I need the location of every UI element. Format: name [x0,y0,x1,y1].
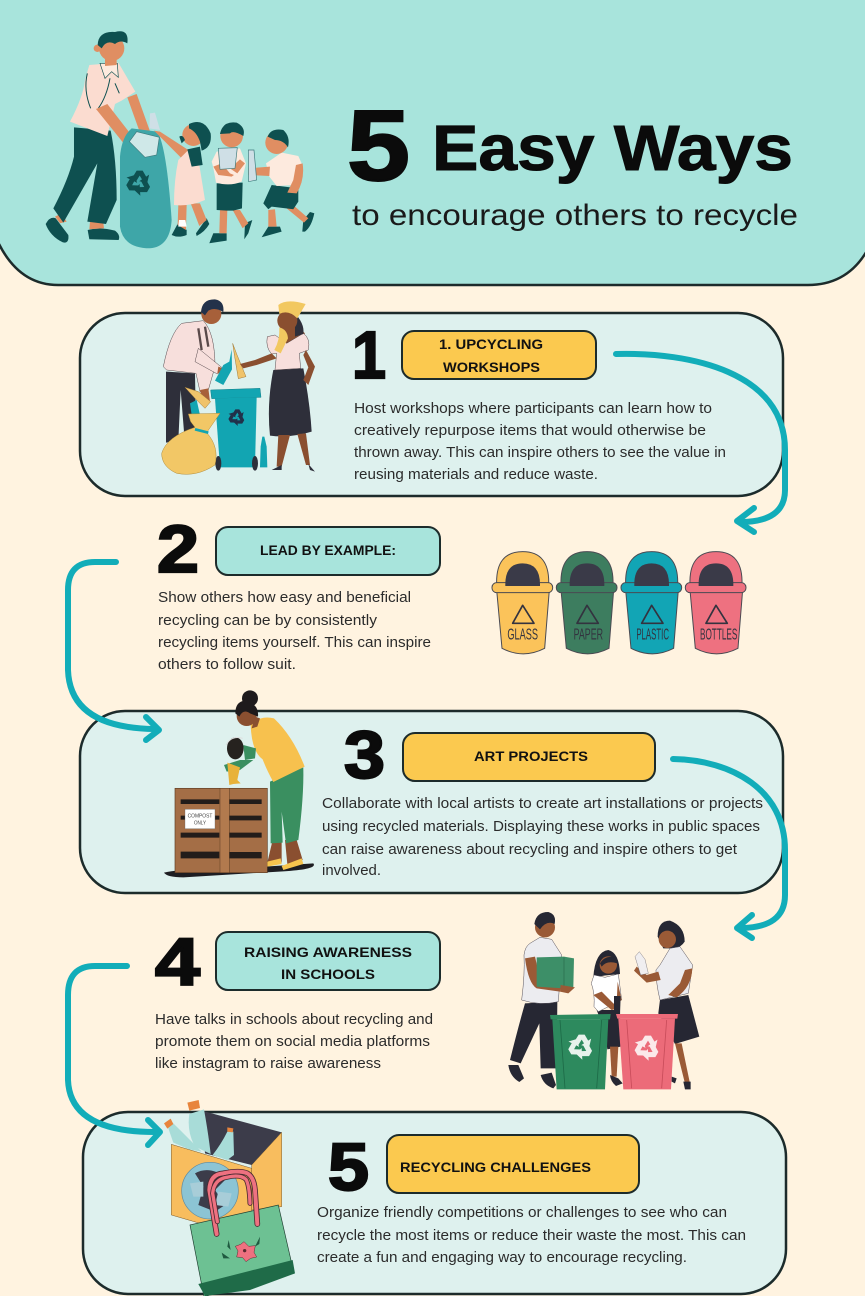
step 4 heading pill [216,932,440,990]
title [347,90,793,202]
step 2 text: recycling items yourself. This can inspire [158,635,431,651]
step 3 illustration: woman emptying a bucket into a compost crate: COMPOST [188,813,213,819]
title: 5 [347,90,410,202]
bin: plastic: PLASTIC [636,626,669,643]
step 1 heading pill: 1. UPCYCLING [439,337,543,352]
step 1 text [354,401,726,483]
step 2 illustration: four labelled recycling bins [492,552,746,654]
header banner [0,0,865,285]
step 5 text [317,1205,746,1266]
step 3 illustration: woman emptying a bucket into a compost crate: ONLY [194,821,206,827]
step 2 text: Show others how easy and beneficial [158,590,411,606]
step 5 text: create a fun and engaging way to encourage recycling. [317,1250,687,1266]
step 2 text: recycling can be by consistently [158,613,378,629]
bin: paper [556,552,617,654]
step 1 number: 1 [352,318,386,393]
step 1 text: reusing materials and reduce waste. [354,467,598,483]
bin: bottles [685,552,746,654]
bin: plastic [621,552,682,654]
step 3 text: can raise awareness about recycling and inspire others to get [322,842,737,858]
step 4 text: Have talks in schools about recycling and [155,1012,433,1028]
step 2 heading pill: LEAD BY EXAMPLE: [260,543,396,558]
step 4 text: promote them on social media platforms [155,1034,430,1050]
arrow from step 4 to step 5 [68,966,160,1145]
step 2 heading pill [216,527,440,575]
panel 5 background [83,1112,786,1294]
step 1 illustration: couple sorting bottles into a bin [162,299,315,474]
step 2 text: others to follow suit. [158,657,296,673]
panel 3 background [80,711,783,893]
step 5 text: recycle the most items or reduce their waste the most. This can [317,1228,746,1244]
step 3 text: using recycled materials. Displaying these works in public spaces [322,819,760,835]
step 4 heading pill: RAISING AWARENESS [244,945,412,960]
arrow from step 1 to step 2 [616,354,785,532]
title: Easy Ways [432,112,793,184]
step 3 text: involved. [322,863,381,879]
step 1 heading pill [402,331,596,379]
step 5 number: 5 [328,1130,369,1205]
arrow from step 2 to step 3 [68,562,159,740]
step 2 text [158,590,431,673]
bin: glass: GLASS [507,626,538,643]
step 5 text: Organize friendly competitions or challenges to see who can [317,1205,727,1221]
arrow from step 3 to step 4 [673,759,785,938]
step 5 illustration: recycling box and tote bag [164,1100,295,1296]
step 3 illustration: woman emptying a bucket into a compost crate [164,690,314,877]
step 2 number: 2 [157,512,199,587]
panel 1 background [80,313,783,496]
step 5 heading pill: RECYCLING CHALLENGES [400,1160,591,1175]
step 4 text: like instagram to raise awareness [155,1056,381,1072]
bin: glass [492,552,553,654]
step 1 text: Host workshops where participants can learn how to [354,401,712,417]
step 1 text: creatively repurpose items that would otherwise be [354,423,706,439]
bin: paper: PAPER [574,626,603,643]
step 4 text [155,1012,433,1072]
header illustration: adult and children recycling bottles [46,31,314,248]
step 5 heading pill [387,1135,639,1193]
step 4 illustration: family at green and red recycling bins [508,912,699,1089]
step 1 text: thrown away. This can inspire others to see the value in [354,445,726,461]
step 4 number: 4 [155,925,200,1000]
step 3 text: Collaborate with local artists to create art installations or projects [322,796,763,812]
step 3 text [322,796,763,879]
step 1 heading pill: WORKSHOPS [443,360,540,375]
step 3 heading pill [403,733,655,781]
step 3 number: 3 [344,718,385,793]
subtitle: to encourage others to recycle [352,199,798,232]
step 4 heading pill: IN SCHOOLS [281,967,375,982]
bin: bottles: BOTTLES [700,626,737,643]
step 3 heading pill: ART PROJECTS [474,749,588,764]
